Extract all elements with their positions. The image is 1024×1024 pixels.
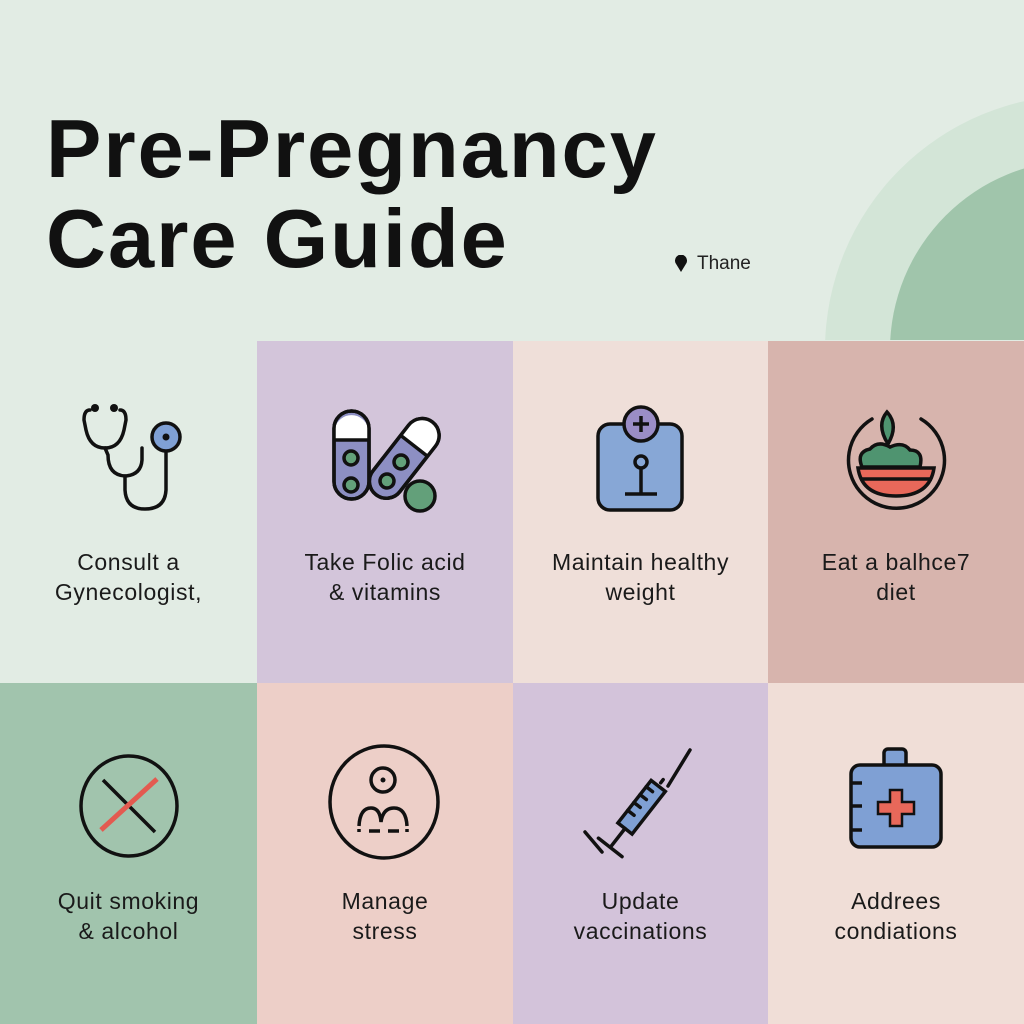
- text: diet: Eat a balhcе7: [822, 549, 970, 575]
- icon: syringe: [583, 748, 692, 858]
- text: conditions: [835, 888, 957, 944]
- text: weight: Maintain healthy: [552, 549, 729, 575]
- text: vaccinations: vaccinations: [574, 918, 707, 944]
- text: stress: [342, 888, 428, 944]
- title: [46, 102, 658, 285]
- text: vaccinations: Update: [602, 888, 679, 914]
- decorative circles: [825, 102, 1024, 340]
- text: conditions: Addrees: [851, 888, 941, 914]
- text: quit: Quit smoking: [58, 888, 199, 914]
- text: weight: weight: [605, 579, 676, 605]
- icon: pills: [332, 409, 441, 513]
- icon: person circle: [328, 744, 440, 860]
- text: weight: [552, 549, 729, 605]
- panel: healthy weight: [513, 341, 768, 683]
- icon: medicine bottle: [849, 747, 943, 849]
- panel: address conditions: [768, 683, 1024, 1024]
- panel: vaccinations: [513, 683, 768, 1024]
- icon: scale: [596, 405, 684, 512]
- icon: no smoking: [79, 754, 179, 858]
- text: consult: [55, 549, 202, 605]
- text: conditions: condiations: [835, 918, 957, 944]
- text: diet: [822, 549, 970, 605]
- text: stress: Manage: [342, 888, 428, 914]
- location tag: Thane: [697, 253, 751, 274]
- title: Care Guide: [46, 192, 509, 285]
- text: quit: [58, 888, 199, 944]
- panel: consult gynecologist: [0, 341, 257, 683]
- panel: manage stress: [257, 683, 513, 1024]
- icon: stethoscope: [82, 404, 182, 511]
- panel: balanced diet: [768, 341, 1024, 683]
- text: folic: Take Folic acid: [304, 549, 466, 575]
- title: Pre-Pregnancy: [46, 102, 658, 195]
- text: quit: & alcohol: [78, 918, 179, 944]
- text: consult: Gynecologist,: [55, 579, 202, 605]
- text: diet: diet: [876, 579, 916, 605]
- text: consult: Consult a: [77, 549, 180, 575]
- panel: folic acid: [257, 341, 513, 683]
- panel: quit smoking: [0, 683, 257, 1024]
- text: vaccinations: [574, 888, 707, 944]
- text: folic: & vitamins: [329, 579, 441, 605]
- text: folic: [304, 549, 466, 605]
- icon: salad bowl: [846, 409, 946, 510]
- text: stress: stress: [353, 918, 417, 944]
